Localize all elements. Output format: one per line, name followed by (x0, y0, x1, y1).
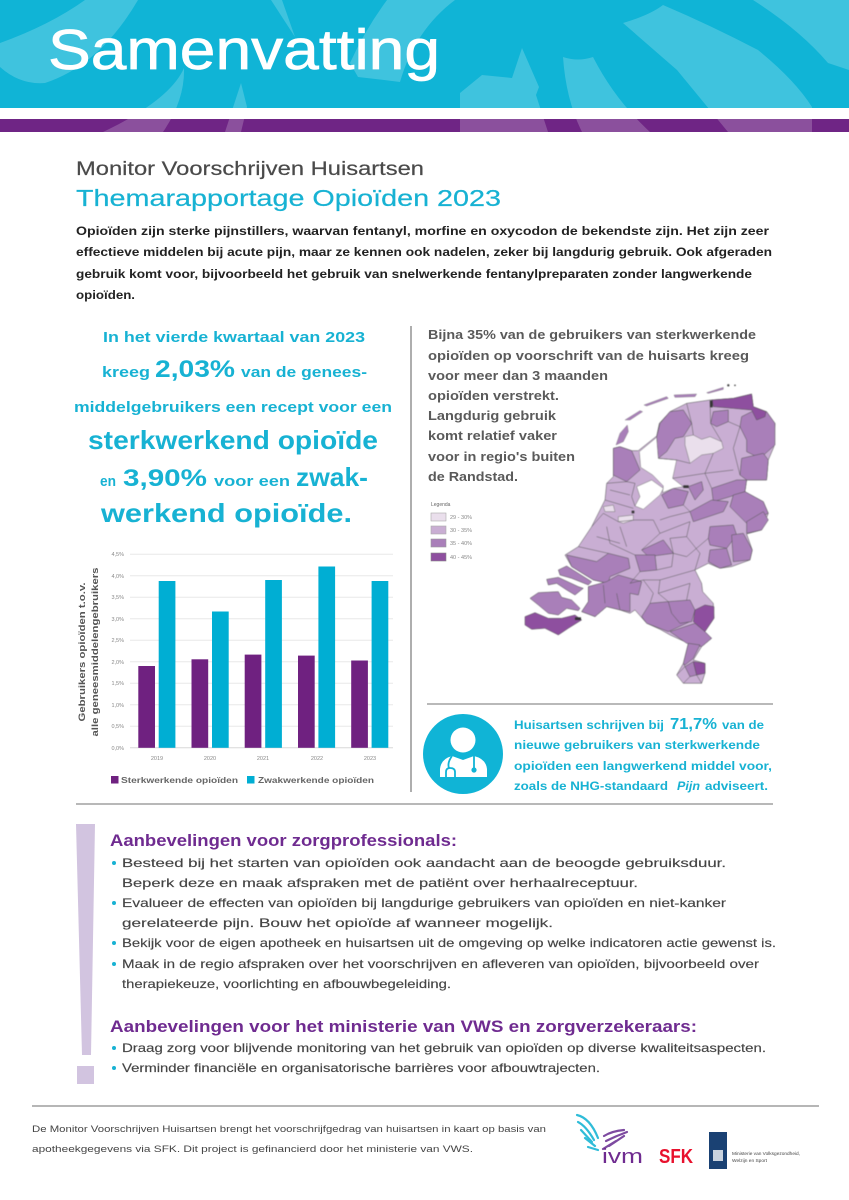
callout: long-acting: opioïden een langwerkend middel voor, (514, 761, 772, 773)
callout: long-acting: Pijn (677, 781, 700, 793)
footer text: apotheekgegevens via SFK. Dit project is gefinancierd door het ministerie van VWS. (32, 1144, 473, 1155)
text: long-term use: opioïden op voorschrift van de huisarts kreeg (428, 349, 749, 363)
y axis ticks: 3,0% (111, 617, 124, 623)
list: recommendations ministry: Draag zorg voor blijvende monitoring van het gebruik van opioïden op diverse kwaliteitsaspecten. (122, 1041, 766, 1055)
y axis ticks: 1,0% (111, 703, 124, 709)
text: long-term use: Bijna 35% van de gebruikers van sterkwerkende (428, 328, 756, 342)
intro text: effectieve middelen bij acute pijn, maar ze kennen ook nadelen, zeker bij langdurig gebruik. Ook afgeraden (76, 247, 772, 259)
blue bars (159, 566, 388, 748)
inland water (635, 437, 683, 509)
x axis years (151, 756, 376, 762)
x axis years: 2019 (151, 756, 163, 762)
callout: key figures: voor een (214, 474, 290, 490)
list: recommendations ministry (112, 1041, 766, 1075)
bar chart: Sterkwerkende opioïden (121, 775, 238, 785)
callout: key figures: kreeg (102, 365, 150, 381)
callout: key figures: sterkwerkend opioïde (88, 425, 378, 455)
medium regions (530, 410, 775, 677)
x axis years: 2022 (311, 756, 323, 762)
y axis ticks: 0,0% (111, 746, 124, 752)
text: long-term use: Langdurig gebruik (428, 409, 556, 423)
logo: ministry: Welzijn en Sport (732, 1158, 768, 1163)
list: recommendations professionals: therapiekeuze, voorlichting en afbouwbegeleiding. (122, 977, 451, 991)
y axis ticks: 2,5% (111, 638, 124, 644)
y axis title (77, 568, 101, 736)
list: recommendations professionals: Besteed bij het starten van opioïden ook aandacht aan de beoogde gebruiksduur. (122, 856, 726, 870)
text: long-term use (428, 328, 756, 484)
callout: long-acting: 71,7% (670, 716, 717, 733)
list: recommendations professionals (112, 856, 776, 991)
heading: monitor: Monitor Voorschrijven Huisartsen (76, 159, 424, 180)
y axis title: Gebruikers opioïden t.o.v. (77, 582, 88, 722)
bar chart: Zwakwerkende opioïden (258, 775, 374, 785)
wadden islands (616, 387, 723, 445)
x axis years: 2020 (204, 756, 216, 762)
x axis years: 2021 (257, 756, 269, 762)
list: recommendations ministry: Verminder financiële en organisatorische barrières voor afbouwtrajecten. (122, 1061, 600, 1075)
callout: long-acting: van de (722, 720, 764, 732)
y axis ticks: 4,5% (111, 552, 124, 558)
intro text: opioïden. (76, 290, 135, 302)
text: long-term use: voor meer dan 3 maanden (428, 369, 608, 383)
text: long-term use: voor in regio's buiten (428, 450, 575, 464)
map legend: 40 - 45% (450, 555, 472, 561)
intro text: Opioïden zijn sterke pijnstillers, waarvan fentanyl, morfine en oxycodon de bekendste zijn. Het zijn zeer (76, 226, 770, 238)
callout: key figures: 3,90% (123, 465, 207, 492)
list: recommendations professionals: gerelateerde pijn. Bouw het opioïde af wanneer mogelijk. (122, 916, 553, 930)
icon: doctor (423, 714, 503, 794)
icon: exclamation mark (76, 824, 95, 1084)
lightest regions (603, 435, 723, 523)
heading: recommendations professionals: Aanbevelingen voor zorgprofessionals: (110, 831, 457, 850)
header banner (0, 0, 849, 132)
intro text: gebruik komt voor, bijvoorbeeld het gebruik van snelwerkende fentanylpreparaten zonder langwerkende (76, 269, 752, 281)
footer text: De Monitor Voorschrijven Huisartsen brengt het voorschrijfgedrag van huisartsen in kaart op basis van (32, 1124, 546, 1135)
map legend: Legenda (431, 502, 451, 508)
y axis ticks: 3,5% (111, 595, 124, 601)
footer text (32, 1124, 546, 1155)
y axis ticks (111, 552, 124, 752)
callout: key figures (74, 330, 392, 528)
panel rule: bottom (76, 803, 773, 805)
logo: ivm: ivm (602, 1146, 643, 1168)
list: recommendations professionals: Beperk deze en maak afspraken met de patiënt over herhaalreceptuur. (122, 876, 638, 890)
map legend: 35 - 40% (450, 541, 472, 547)
logo: ministry: Ministerie van Volksgezondheid, (732, 1151, 800, 1156)
y axis title: alle geneesmiddelengebruikers (90, 568, 101, 736)
text: long-term use: komt relatief vaker (428, 429, 557, 443)
intro text (76, 226, 772, 302)
y axis ticks: 0,5% (111, 724, 124, 730)
callout: key figures: en (100, 474, 116, 490)
list: recommendations professionals: Maak in de regio afspraken over het voorschrijven en afleveren van opioïden, bijvoorbeeld over (122, 957, 759, 971)
map legend (431, 502, 472, 561)
bar chart (77, 552, 393, 785)
panel rule: vertical (410, 326, 412, 792)
heading: recommendations ministry: Aanbevelingen voor het ministerie van VWS en zorgverzekeraars: (110, 1017, 697, 1036)
callout: key figures: 2,03% (155, 356, 235, 383)
y axis ticks: 1,5% (111, 681, 124, 687)
text: long-term use: de Randstad. (428, 470, 518, 484)
darkest regions (525, 394, 766, 675)
logo: ministry (709, 1132, 800, 1169)
callout: long-acting: Huisartsen schrijven bij (514, 720, 664, 732)
land base (565, 394, 775, 683)
list: recommendations professionals: Evalueer de effecten van opioïden bij langdurige gebruikers van opioïden en niet-kanker (122, 896, 726, 910)
callout: key figures: zwak- (296, 462, 368, 492)
map legend: 30 - 35% (450, 528, 472, 534)
x axis years: 2023 (364, 756, 376, 762)
map legend: 29 - 30% (450, 515, 472, 521)
callout: key figures: van de genees- (241, 365, 367, 381)
purple bars (138, 655, 368, 748)
chart legend (111, 776, 118, 784)
panel rule: top (427, 703, 773, 705)
list: recommendations professionals: Bekijk voor de eigen apotheek en huisartsen uit de omgeving op welke indicatoren actie gewenst is. (122, 936, 776, 950)
heading: themarapportage: Themarapportage Opioïden 2023 (76, 185, 501, 211)
municipal borders (578, 400, 740, 683)
logo: ivm (577, 1115, 643, 1168)
callout: long-acting (514, 716, 772, 793)
small dark urban clusters (575, 401, 713, 620)
y axis ticks: 2,0% (111, 660, 124, 666)
callout: long-acting: nieuwe gebruikers van sterkwerkende (514, 740, 760, 752)
text: long-term use: opioïden verstrekt. (428, 389, 559, 403)
callout: key figures: werkend opioïde. (100, 498, 352, 528)
callout: long-acting: zoals de NHG-standaard (514, 781, 668, 793)
callout: key figures: In het vierde kwartaal van 2023 (103, 330, 365, 346)
callout: key figures: middelgebruikers een recept voor een (74, 400, 392, 416)
callout: long-acting: adviseert. (705, 781, 768, 793)
title: Samenvatting (48, 18, 440, 82)
choropleth map of the Netherlands (525, 384, 775, 683)
logo: SFK: SFK (659, 1146, 693, 1168)
y axis ticks: 4,0% (111, 574, 124, 580)
